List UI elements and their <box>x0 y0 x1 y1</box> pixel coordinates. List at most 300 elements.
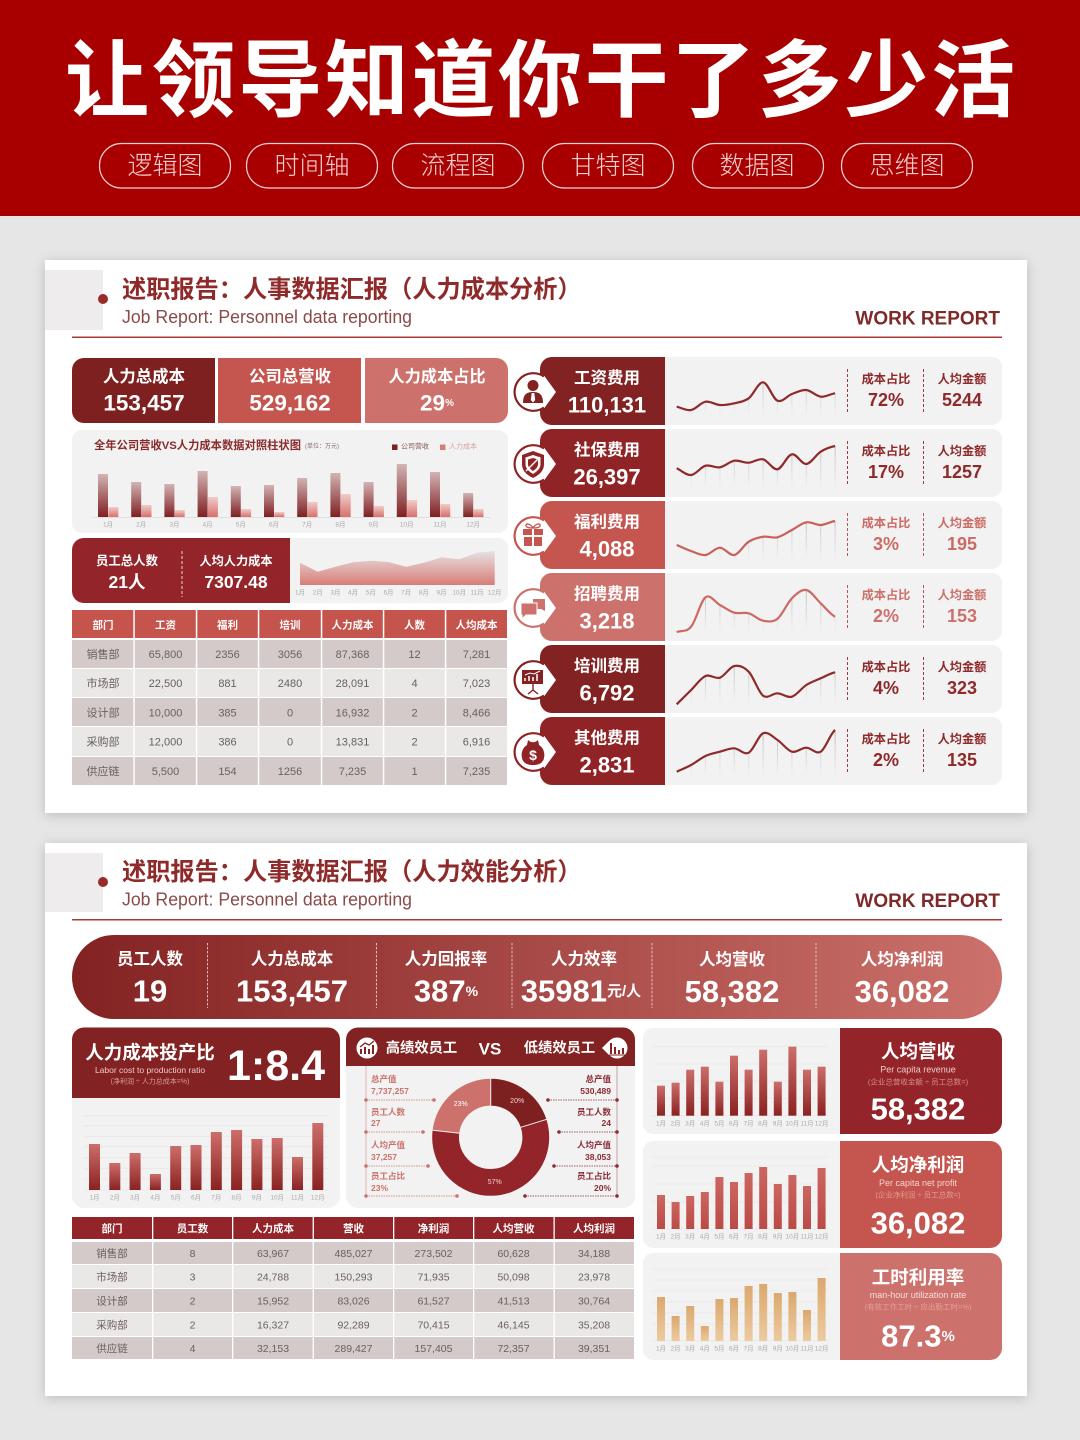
stats: 17% <box>868 462 904 482</box>
stats: 人均金额 <box>938 371 986 386</box>
month axis: 10月 <box>270 1194 284 1202</box>
stats: 1257 <box>942 462 982 482</box>
month axis: 8月 <box>758 1232 768 1240</box>
headcount and per capita cost strip: 21人 <box>109 572 146 592</box>
month axis: 5月 <box>714 1120 724 1128</box>
left stats: high performers: 37,257 <box>371 1152 397 1162</box>
panel header: 述职报告：人事数据汇报（人力成本分析） <box>122 276 582 304</box>
icon: presentation board <box>513 660 556 700</box>
month axis: 1月 <box>656 1344 666 1352</box>
area chart month axis: 1月 <box>295 588 305 596</box>
month axis: 4月 <box>700 1344 710 1352</box>
panel: input-output ratio: (净利润 ÷ 人力总成本=%) <box>111 1076 189 1086</box>
table header: 员工数 <box>177 1222 209 1235</box>
stats: 成本占比 <box>862 443 910 458</box>
table rows: 50,098 <box>497 1272 530 1284</box>
card: per capita revenue: 人均营收 <box>881 1041 955 1062</box>
KPI band <box>72 935 1002 1019</box>
KPI: total labor cost: 153,457 <box>103 390 185 416</box>
month axis: 11月 <box>433 520 447 528</box>
month axis: 12月 <box>815 1344 828 1352</box>
table rows: 154 <box>218 766 237 778</box>
month axis: 11月 <box>800 1344 814 1352</box>
sparkline <box>677 730 835 777</box>
table rows: 设计部 <box>86 706 120 720</box>
stats: 153 <box>947 606 977 626</box>
expense row: other: 2,831 <box>579 752 635 778</box>
month axis: 2月 <box>671 1344 681 1352</box>
table rows: 13,831 <box>336 736 369 748</box>
table rows: 1 <box>411 766 418 778</box>
table header: 人数 <box>404 618 425 632</box>
stats: 人均金额 <box>938 659 986 674</box>
table rows: 28,091 <box>336 678 369 690</box>
stats <box>848 441 986 486</box>
table rows: 2480 <box>278 678 302 690</box>
table rows: 市场部 <box>86 676 120 690</box>
chart: revenue vs labor cost <box>72 430 508 533</box>
month axis: 2月 <box>671 1120 681 1128</box>
month axis: 12月 <box>815 1232 828 1240</box>
panel header: 述职报告：人事数据汇报（人力效能分析） <box>122 859 582 886</box>
area chart month axis <box>295 588 502 596</box>
card: per capita net profit <box>643 1141 1002 1248</box>
table rows: 39,351 <box>578 1343 610 1355</box>
panel: cost analysis <box>45 260 1027 813</box>
table header <box>102 1222 615 1235</box>
stats: 人均金额 <box>938 587 986 602</box>
table header: 部门 <box>92 618 114 632</box>
month axis: 8月 <box>232 1194 242 1202</box>
expense row: training: 培训费用 <box>574 656 640 676</box>
expense row: welfare: 4,088 <box>579 536 635 562</box>
month axis: 10月 <box>400 520 414 528</box>
bars <box>657 1278 826 1341</box>
month axis: 7月 <box>744 1120 754 1128</box>
headcount and per capita cost strip: 人均人力成本 <box>199 553 273 568</box>
KPI per capita profit <box>855 949 949 1009</box>
month axis: 6月 <box>729 1232 739 1240</box>
month axis: 6月 <box>729 1120 739 1128</box>
month axis <box>656 1232 828 1240</box>
sparkline <box>677 446 835 489</box>
area chart month axis: 5月 <box>366 588 376 596</box>
month axis: 7月 <box>211 1194 221 1202</box>
month axis: 4月 <box>700 1120 710 1128</box>
table header: 部门 <box>102 1222 122 1235</box>
stats <box>848 585 986 630</box>
month axis: 7月 <box>744 1344 754 1352</box>
area chart month axis: 6月 <box>383 588 394 596</box>
expense row: salary: 110,131 <box>568 392 646 418</box>
stats: 2% <box>873 606 899 626</box>
area chart month axis: 12月 <box>488 588 502 596</box>
table rows: 市场部 <box>96 1270 128 1284</box>
table header: 人均营收 <box>492 1222 535 1235</box>
table header: 人力成本 <box>252 1222 294 1235</box>
expense row: recruiting <box>513 573 1002 641</box>
month axis: 4月 <box>700 1232 710 1240</box>
table rows: 70,415 <box>417 1320 450 1332</box>
panel: high vs low performers: VS <box>479 1040 501 1058</box>
month axis: 6月 <box>269 520 279 528</box>
table rows: 7,235 <box>339 766 366 778</box>
right stats: low performers: 总产值 <box>585 1074 611 1084</box>
table header: 福利 <box>217 618 238 632</box>
table rows: 35,208 <box>578 1320 610 1332</box>
table rows: 3 <box>190 1272 196 1284</box>
table rows: 3056 <box>278 649 302 661</box>
month axis: 3月 <box>169 520 179 528</box>
left stats: high performers: 27 <box>371 1118 381 1128</box>
table rows: 46,145 <box>497 1320 530 1332</box>
table rows: 386 <box>218 736 237 748</box>
right stats: low performers: 530,489 <box>580 1086 611 1096</box>
table rows: 设计部 <box>96 1294 128 1308</box>
icon: low bars <box>602 1038 628 1058</box>
month axis: 8月 <box>758 1120 768 1128</box>
stats: 323 <box>947 678 977 698</box>
month axis: 2月 <box>136 520 146 528</box>
expense row: social insurance <box>513 429 1002 497</box>
card: man-hour utilization <box>643 1253 1002 1360</box>
table rows: 16,932 <box>336 708 369 720</box>
icon: growth chart <box>356 1038 378 1058</box>
chart: revenue vs labor cost: 全年公司营收VS人力成本数据对照柱状图 <box>94 438 301 452</box>
donut chart: 20% <box>510 1098 524 1105</box>
KPI per capita profit: 36,082 <box>855 974 949 1009</box>
table rows: 7,235 <box>463 766 490 778</box>
card: per capita revenue: Per capita revenue <box>880 1064 956 1074</box>
month axis: 3月 <box>685 1232 695 1240</box>
month axis: 11月 <box>800 1120 814 1128</box>
chart: revenue vs labor cost: (单位：万元) <box>305 442 339 450</box>
pill labels <box>127 152 945 180</box>
table rows: 65,800 <box>149 649 182 661</box>
stats: 成本占比 <box>862 587 910 602</box>
table rows: 15,952 <box>257 1296 289 1308</box>
pill labels: 数据图 <box>719 152 795 180</box>
legend: 公司营收 <box>401 442 429 450</box>
expense row: training <box>513 645 1002 713</box>
month axis: 5月 <box>714 1232 724 1240</box>
table rows: 8,466 <box>463 708 490 720</box>
table rows: 2356 <box>215 649 240 661</box>
stats: 成本占比 <box>862 371 910 386</box>
bars <box>89 1123 323 1190</box>
month axis: 11月 <box>291 1194 304 1202</box>
table rows: 22,500 <box>149 678 182 690</box>
stats <box>848 657 986 702</box>
table rows <box>96 1247 610 1355</box>
pill labels: 流程图 <box>420 152 496 180</box>
month axis: 11月 <box>800 1232 814 1240</box>
bars <box>657 1047 826 1116</box>
headcount and per capita cost strip: 7307.48 <box>204 572 268 592</box>
panel: input-output ratio: Labor cost to production ratio <box>95 1065 205 1075</box>
month axis <box>103 520 480 528</box>
KPI: total revenue: 公司总营收 <box>249 367 331 386</box>
expense row: recruiting: 招聘费用 <box>574 584 640 604</box>
icon: gift <box>513 516 556 556</box>
KPI efficiency: 人力效率 <box>551 948 617 968</box>
expense row: recruiting: 3,218 <box>579 608 635 634</box>
sparkline <box>677 382 835 417</box>
KPI: total labor cost <box>72 358 215 423</box>
pill labels: 思维图 <box>869 152 945 180</box>
stats <box>848 369 986 414</box>
area chart month axis: 11月 <box>470 588 484 596</box>
table header <box>92 618 498 632</box>
stats: 人均金额 <box>938 515 986 530</box>
card: per capita net profit: Per capita net profit <box>879 1178 958 1188</box>
card: man-hour utilization: man-hour utilization rate <box>870 1290 966 1300</box>
table rows: 5,500 <box>152 766 179 778</box>
left stats: high performers: 员工占比 <box>371 1171 406 1181</box>
expense row: other <box>513 717 1002 785</box>
KPI efficiency: 35981元/人 <box>521 974 641 1008</box>
table rows <box>86 647 490 778</box>
month axis: 12月 <box>466 520 480 528</box>
table: department performance <box>72 1217 634 1359</box>
KPI: total labor cost: 人力总成本 <box>103 367 185 386</box>
KPI per capita revenue <box>685 950 779 1009</box>
month axis: 10月 <box>786 1120 799 1128</box>
icon: money bag: $ <box>529 747 537 763</box>
stats: 人均金额 <box>938 443 986 458</box>
table header: 人均成本 <box>456 618 498 632</box>
month axis: 9月 <box>773 1344 783 1352</box>
sparkline <box>677 521 835 561</box>
area chart month axis: 9月 <box>437 588 447 596</box>
right stats: low performers: 38,053 <box>585 1152 611 1162</box>
KPI per capita profit: 人均净利润 <box>861 949 943 969</box>
table header: 人力成本 <box>332 618 374 632</box>
category pills <box>100 144 972 188</box>
panel header: Job Report: Personnel data reporting <box>122 307 412 327</box>
table rows: 4 <box>190 1343 196 1355</box>
month axis: 1月 <box>656 1120 666 1128</box>
table rows: 92,289 <box>337 1320 370 1332</box>
month axis: 2月 <box>671 1232 681 1240</box>
KPI headcount: 员工人数 <box>117 950 184 968</box>
month axis: 1月 <box>103 520 113 528</box>
month axis: 9月 <box>369 520 379 528</box>
table rows: 72,357 <box>497 1343 530 1355</box>
KPI: labor cost ratio: 29% <box>420 390 454 416</box>
card: per capita net profit: 人均净利润 <box>872 1154 964 1176</box>
stats: 成本占比 <box>862 515 910 530</box>
card: per capita net profit: 36,082 <box>871 1206 965 1240</box>
month axis: 5月 <box>714 1344 724 1352</box>
expense row: welfare <box>513 501 1002 569</box>
table rows: 销售部 <box>96 1247 128 1260</box>
area chart month axis: 2月 <box>313 588 323 596</box>
right stats: low performers: 员工占比 <box>577 1171 611 1181</box>
KPI headcount: 19 <box>133 974 167 1008</box>
month axis: 3月 <box>685 1344 695 1352</box>
month axis: 7月 <box>744 1232 754 1240</box>
month axis: 5月 <box>236 520 246 528</box>
KPI per capita revenue: 58,382 <box>685 974 779 1009</box>
expense row: salary <box>513 357 1002 425</box>
KPI total cost: 153,457 <box>236 974 348 1008</box>
panel: high vs low performers: 高绩效员工 <box>386 1038 457 1056</box>
KPI: total revenue: 529,162 <box>249 390 331 416</box>
table rows: 7,023 <box>463 678 490 690</box>
KPI: labor cost ratio <box>365 358 508 423</box>
table header: 培训 <box>280 618 300 632</box>
icon: chat bubbles <box>513 588 556 628</box>
panel: input-output ratio: 人力成本投产比 <box>85 1042 215 1063</box>
left stats: high performers: 人均产值 <box>371 1140 406 1150</box>
table rows: 63,967 <box>257 1248 289 1260</box>
card: man-hour utilization: 87.3% <box>881 1318 955 1354</box>
expense row: social insurance: 26,397 <box>573 464 641 490</box>
panel header: Job Report: Personnel data reporting <box>122 890 412 910</box>
stats: 135 <box>947 750 977 770</box>
right stats: low performers: 员工人数 <box>577 1107 611 1117</box>
KPI return rate <box>405 948 487 1008</box>
pill labels: 时间轴 <box>274 152 350 180</box>
legend: 人力成本 <box>449 442 477 450</box>
icon: employee <box>513 372 556 412</box>
donut chart <box>433 1078 547 1186</box>
table rows: 6,916 <box>463 736 490 748</box>
table rows: 2 <box>190 1296 196 1308</box>
expense row: welfare: 福利费用 <box>574 512 640 532</box>
table rows: 7,281 <box>463 649 490 661</box>
table rows: 4 <box>411 678 418 690</box>
KPI return rate: 387% <box>414 974 479 1008</box>
table rows: 273,502 <box>415 1248 453 1260</box>
panel: input-output ratio: 1:8.4 <box>227 1042 325 1090</box>
right stats: low performers <box>523 1066 619 1198</box>
expense row: training: 6,792 <box>579 680 635 706</box>
stats <box>848 513 986 558</box>
table rows: 0 <box>287 736 293 748</box>
table header: 营收 <box>343 1222 364 1235</box>
month axis: 9月 <box>252 1194 262 1202</box>
donut chart: 23% <box>454 1101 468 1108</box>
table rows: 34,188 <box>578 1248 610 1260</box>
table rows: 2 <box>411 736 418 748</box>
bars <box>657 1167 826 1229</box>
card: man-hour utilization: (有效工作工时 ÷ 应出勤工时=%) <box>865 1302 972 1312</box>
headcount and per capita cost strip <box>72 538 508 603</box>
panel: efficiency analysis <box>45 843 1027 1396</box>
table header: 净利润 <box>418 1222 449 1235</box>
table rows: 8 <box>190 1248 196 1260</box>
month axis: 7月 <box>302 520 312 528</box>
table rows: 采购部 <box>86 734 120 748</box>
sparkline <box>677 590 835 633</box>
month axis: 8月 <box>335 520 345 528</box>
month axis: 10月 <box>786 1344 799 1352</box>
left stats: high performers: 7,737,257 <box>371 1086 409 1096</box>
KPI: labor cost ratio: 人力成本占比 <box>388 367 486 386</box>
month axis: 5月 <box>171 1194 181 1202</box>
table rows: 采购部 <box>96 1318 128 1332</box>
left stats: high performers: 员工人数 <box>371 1107 406 1117</box>
KPI: total revenue <box>218 358 361 423</box>
right stats: low performers: 20% <box>594 1183 611 1193</box>
table rows: 289,427 <box>335 1343 373 1355</box>
month axis: 1月 <box>89 1194 100 1202</box>
KPI total cost: 人力总成本 <box>251 948 334 968</box>
table rows: 87,368 <box>336 649 369 661</box>
card: per capita revenue: (企业总营收金额 ÷ 员工总数=) <box>868 1076 969 1086</box>
table rows: 150,293 <box>335 1272 373 1284</box>
stats: 72% <box>868 390 904 410</box>
month axis: 6月 <box>191 1194 201 1202</box>
table header: 工资 <box>155 620 176 632</box>
area chart <box>300 551 495 585</box>
panel header <box>45 270 1002 338</box>
stats: 成本占比 <box>862 659 910 674</box>
card: per capita revenue <box>643 1028 1002 1134</box>
month axis: 1月 <box>656 1232 666 1240</box>
table rows: 2 <box>411 708 418 720</box>
pill labels: 甘特图 <box>570 152 646 180</box>
panel header: WORK REPORT <box>855 891 1000 912</box>
stats: 4% <box>873 678 899 698</box>
month axis: 2月 <box>110 1194 120 1202</box>
stats: 成本占比 <box>862 731 910 746</box>
table header: 人均利润 <box>573 1222 615 1235</box>
table rows: 485,027 <box>335 1248 373 1260</box>
table rows: 0 <box>287 708 293 720</box>
table rows: 157,405 <box>415 1343 453 1355</box>
card: man-hour utilization: 工时利用率 <box>872 1267 964 1288</box>
month axis: 9月 <box>773 1120 783 1128</box>
labor cost bars <box>108 494 484 517</box>
sparkline <box>677 666 835 705</box>
header banner <box>0 0 1080 216</box>
stats: 5244 <box>942 390 982 410</box>
table rows: 供应链 <box>86 764 120 778</box>
icon: money bag <box>513 732 556 772</box>
area chart month axis: 3月 <box>330 588 340 596</box>
panel header: WORK REPORT <box>855 308 1000 330</box>
table rows: 10,000 <box>149 708 182 720</box>
month axis: 3月 <box>130 1194 140 1202</box>
area chart month axis: 10月 <box>452 588 466 596</box>
stats: 195 <box>947 534 977 554</box>
panel: input-output ratio <box>72 1028 340 1208</box>
month axis: 4月 <box>150 1194 160 1202</box>
revenue bars <box>98 464 473 517</box>
expense row: salary: 工资费用 <box>574 368 640 388</box>
left stats: high performers <box>364 1066 459 1198</box>
KPI headcount <box>117 950 184 1008</box>
table rows: 12 <box>408 649 421 661</box>
table rows: 71,935 <box>417 1272 450 1284</box>
card: per capita net profit: (企业净利润 ÷ 员工总数=) <box>875 1190 961 1200</box>
month axis <box>656 1344 828 1352</box>
month axis: 3月 <box>685 1120 695 1128</box>
pill labels: 逻辑图 <box>127 152 203 180</box>
stats: 2% <box>873 750 899 770</box>
month axis: 9月 <box>773 1232 783 1240</box>
right stats: low performers: 24 <box>602 1118 611 1128</box>
month axis: 12月 <box>815 1120 828 1128</box>
KPI per capita revenue: 人均营收 <box>699 950 766 969</box>
area chart month axis: 8月 <box>419 588 429 596</box>
area chart month axis: 7月 <box>401 588 411 596</box>
card: per capita revenue: 58,382 <box>871 1092 965 1126</box>
month axis: 10月 <box>786 1232 799 1240</box>
